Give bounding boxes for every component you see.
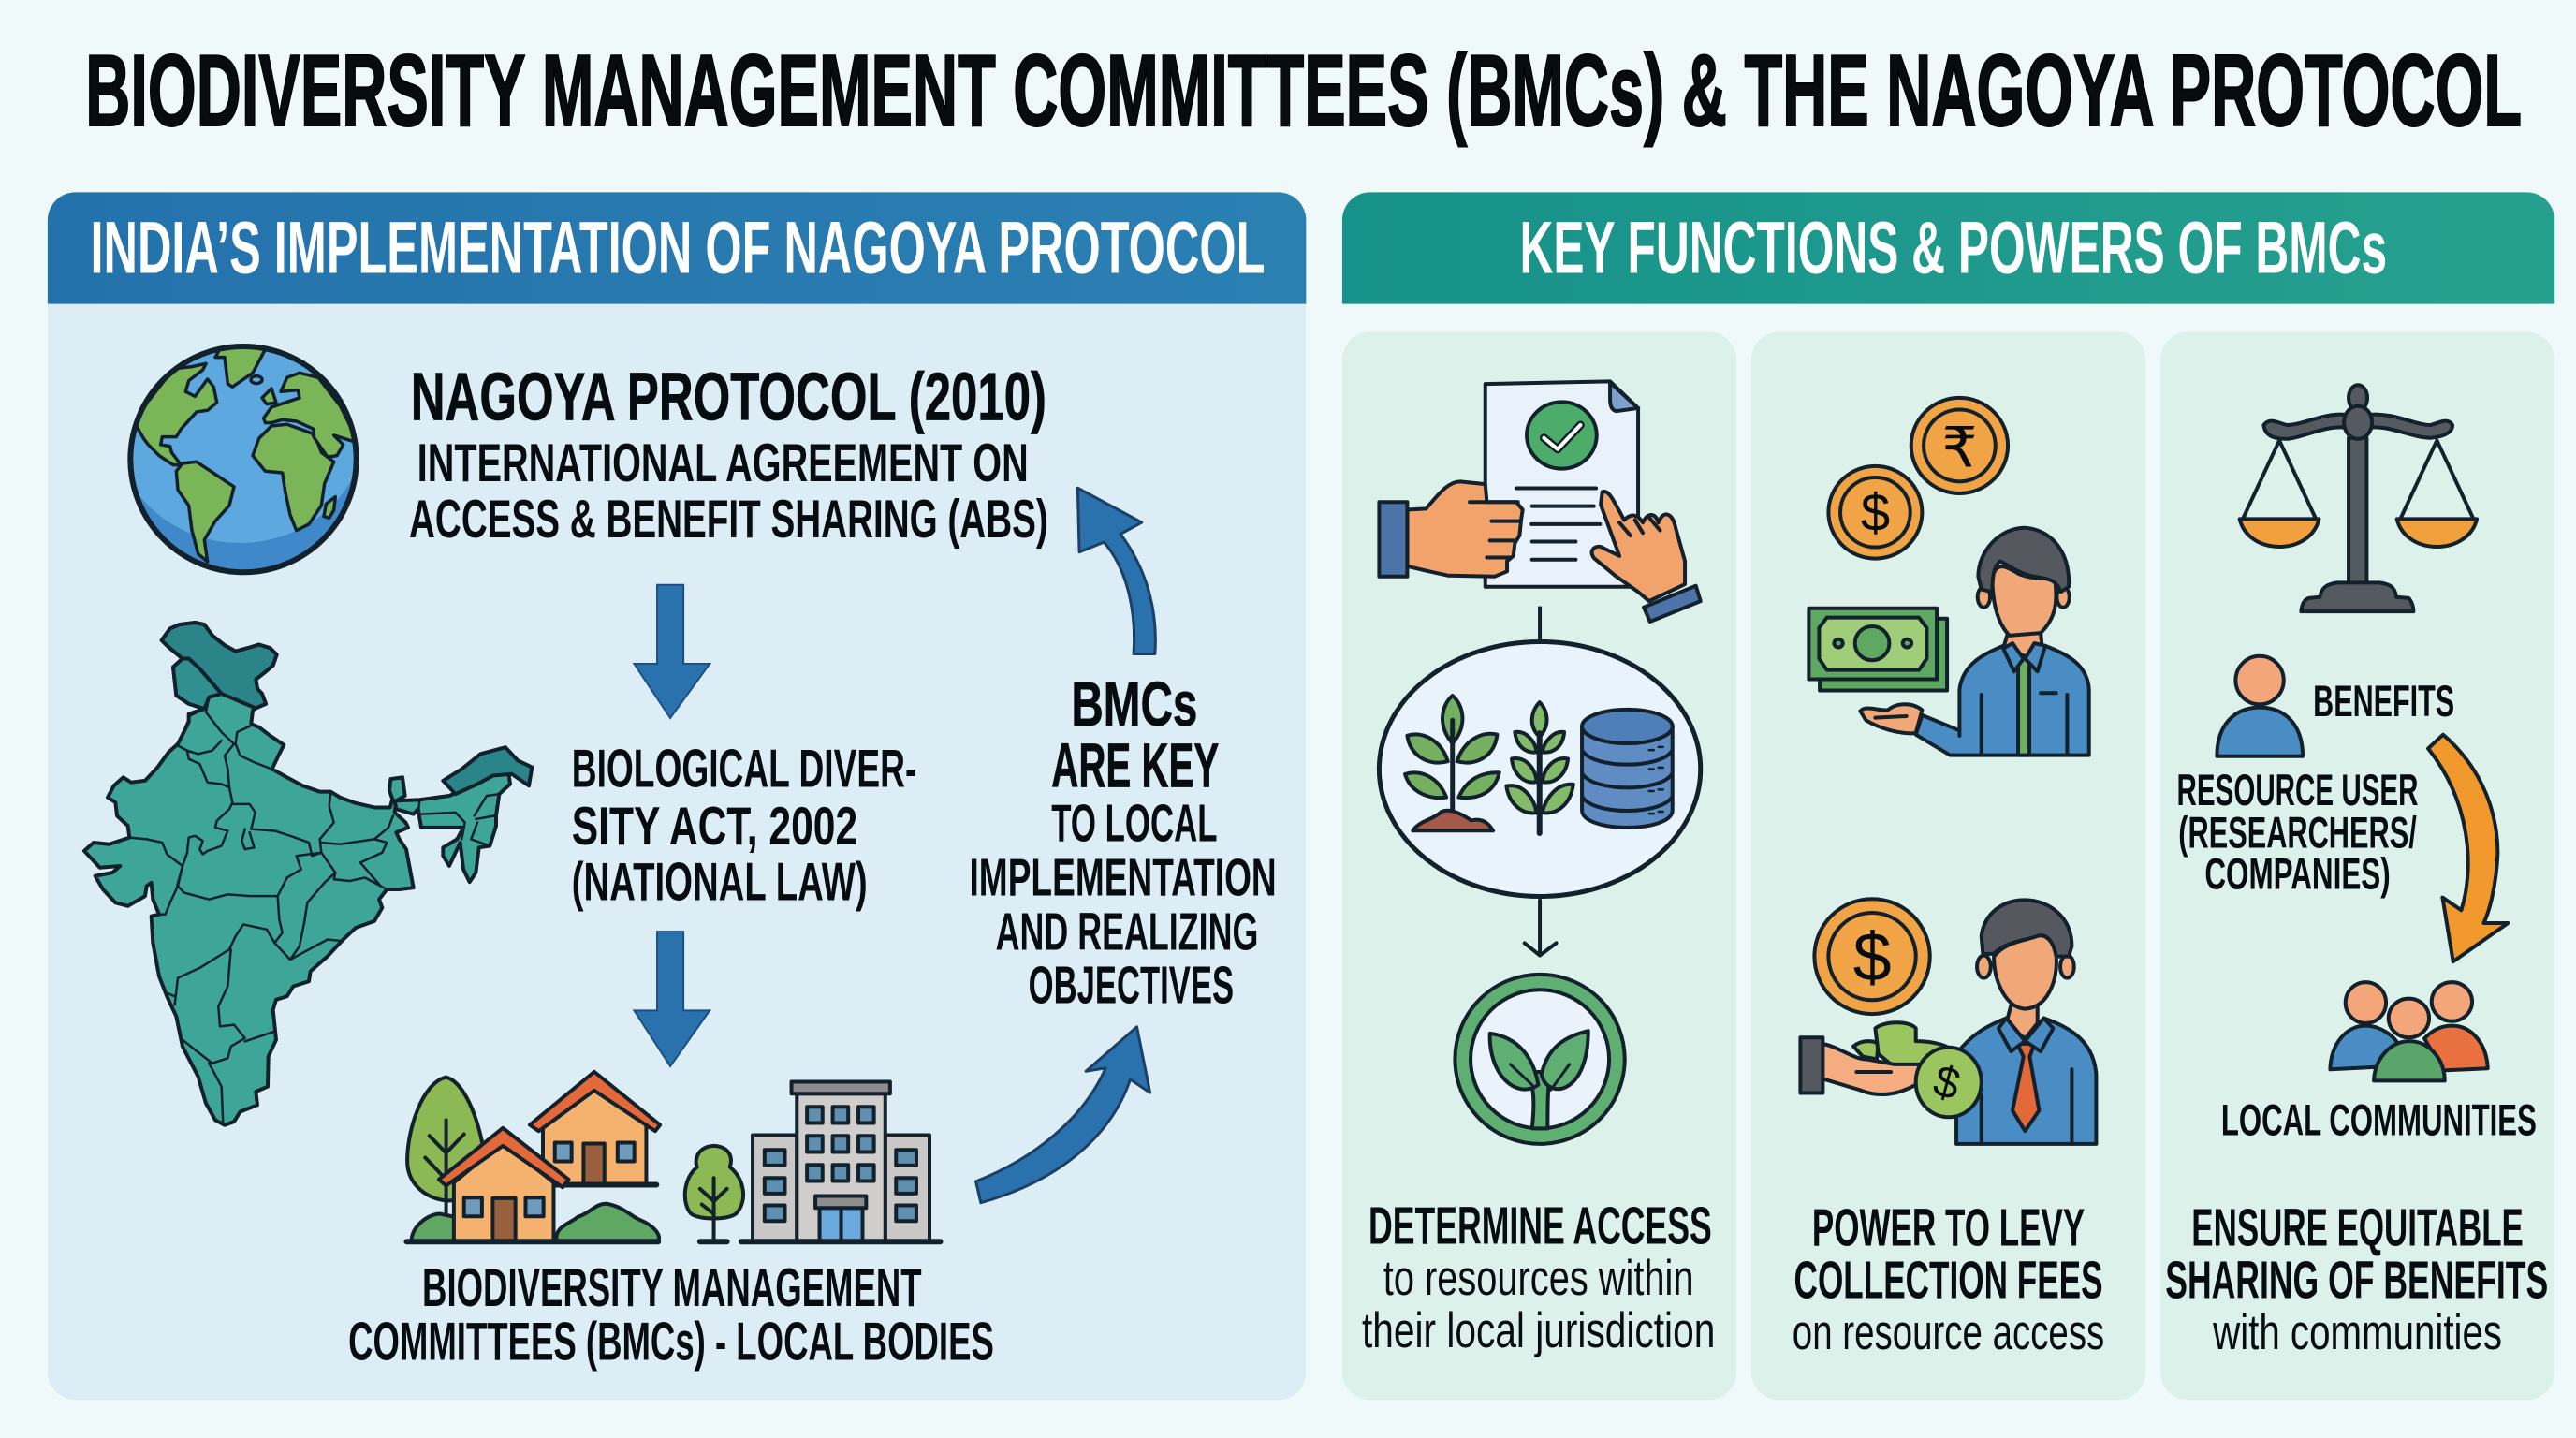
text: Biological Diversity Act: BIOLOGICAL DIVER- <box>572 740 916 800</box>
text: power to levy: on resource access <box>1793 1305 2104 1360</box>
text: BMCs are key: ARE KEY <box>1051 732 1219 801</box>
text: resource user: (RESEARCHERS/ <box>2178 809 2417 858</box>
label: benefits: BENEFITS <box>2313 677 2454 726</box>
panel: key functions heading bar <box>1342 192 2554 304</box>
text: BMCs are key: OBJECTIVES <box>1029 955 1234 1014</box>
icon: office building <box>741 1082 940 1241</box>
text: determine access: DETERMINE ACCESS <box>1368 1196 1712 1255</box>
text: Biodiversity Management Committees: COMMITTEES (BMCs) - LOCAL BODIES <box>348 1312 994 1372</box>
icon: sprout in ring <box>1455 975 1625 1144</box>
text: determine access: to resources within <box>1383 1251 1694 1306</box>
arrow: BMCs curving up to key statement <box>976 1027 1150 1203</box>
panel: equitable sharing <box>2160 332 2554 1400</box>
icon: balance scale <box>2240 385 2477 611</box>
text: power to levy: COLLECTION FEES <box>1794 1250 2103 1309</box>
icon: coins, banknote and officer <box>1808 398 2089 756</box>
arrow: Nagoya to Biological Diversity Act <box>634 585 710 718</box>
text: Nagoya Protocol: ACCESS & BENEFIT SHARING (ABS) <box>409 490 1048 550</box>
coin symbol: rupee: ₹ <box>1942 416 1977 480</box>
text: ensure equitable sharing <box>2165 1197 2548 1360</box>
icon: plants and data in oval <box>1379 641 1701 896</box>
text: Biodiversity Management Committees <box>348 1258 994 1372</box>
text: Biological Diversity Act <box>572 740 916 913</box>
text: Nagoya Protocol: INTERNATIONAL AGREEMENT ON <box>417 433 1029 493</box>
panel: India's implementation of Nagoya Protocol <box>48 192 1306 1400</box>
panel: determine access <box>1342 332 1736 1400</box>
text: power to levy: POWER TO LEVY <box>1812 1197 2085 1256</box>
text: BMCs are key: TO LOCAL <box>1051 794 1218 853</box>
text: determine access <box>1362 1196 1715 1358</box>
panel: power to levy fees <box>1751 332 2145 1400</box>
panel background <box>48 192 1306 1400</box>
icon: globe <box>127 344 359 575</box>
icon: local communities <box>2330 982 2488 1080</box>
text: resource user: RESOURCE USER <box>2177 766 2419 815</box>
icon: hands holding approved document <box>1379 381 1701 622</box>
connector line <box>1538 607 1542 640</box>
coin symbol: dollar: $ <box>1861 483 1890 542</box>
card background <box>2160 332 2554 1400</box>
text: Biological Diversity Act: (NATIONAL LAW) <box>572 853 868 913</box>
icon: resource user <box>2217 656 2303 756</box>
text: Nagoya Protocol: NAGOYA PROTOCOL (2010) <box>411 360 1046 434</box>
text: BMCs are key: AND REALIZING <box>996 902 1258 961</box>
arrow: benefits flowing to communities <box>2428 735 2508 961</box>
map: India <box>84 623 532 1125</box>
money bag symbol: $ <box>1928 1056 1965 1110</box>
text: BMCs are key: IMPLEMENTATION <box>970 847 1277 906</box>
panel heading: INDIA’S IMPLEMENTATION OF NAGOYA PROTOCOL <box>91 206 1265 288</box>
arrow: down to sprout <box>1525 901 1557 956</box>
text: Biological Diversity Act: SITY ACT, 2002 <box>572 797 857 857</box>
text: Biodiversity Management Committees: BIODIVERSITY MANAGEMENT <box>422 1258 922 1318</box>
card background <box>1751 332 2145 1400</box>
card background <box>1342 332 1736 1400</box>
text: determine access: their local jurisdiction <box>1362 1303 1715 1358</box>
icon: houses and trees <box>406 1072 743 1241</box>
text: resource user: COMPANIES) <box>2204 849 2391 899</box>
text: power to levy <box>1793 1197 2104 1360</box>
text: Nagoya Protocol <box>409 360 1048 550</box>
text: resource user <box>2177 766 2419 899</box>
text: BMCs are key: BMCs <box>1071 670 1197 740</box>
icon: hand giving money to officer <box>1800 899 2096 1144</box>
text: BMCs are key <box>970 670 1277 1014</box>
arrow: Act to BMCs <box>634 932 710 1066</box>
arrow: curving back up to Nagoya Protocol <box>1077 488 1155 654</box>
coin symbol: large dollar: $ <box>1853 918 1892 996</box>
panel heading bar <box>48 192 1306 304</box>
